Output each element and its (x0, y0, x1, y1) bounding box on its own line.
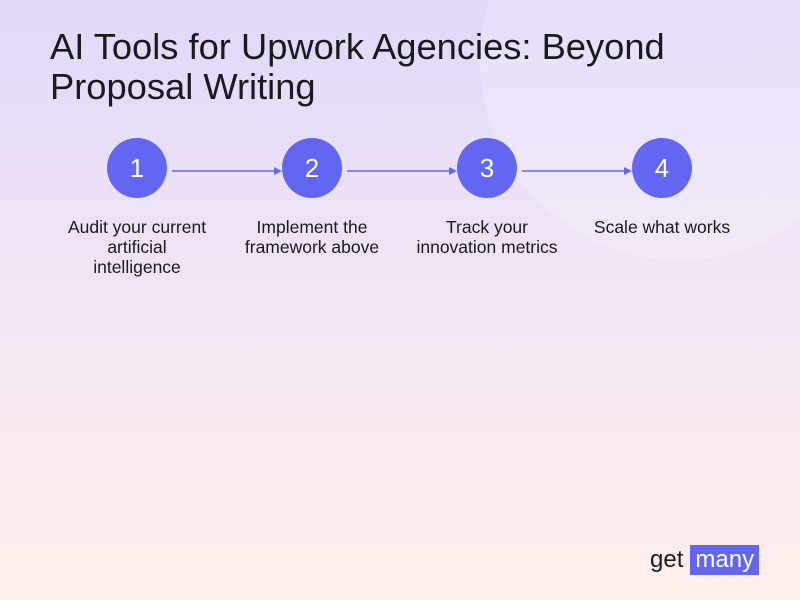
step 3 (457, 138, 517, 198)
label 3: Track your innovation metrics (416, 217, 558, 257)
step 4 (632, 138, 692, 198)
step 2: 2 (305, 153, 319, 183)
label 2: Implement the framework above (245, 217, 379, 257)
step 1 (107, 138, 167, 198)
title (50, 26, 665, 107)
title: Proposal Writing (50, 66, 316, 107)
logo: many (695, 546, 754, 573)
step 3: 3 (480, 153, 494, 183)
step 2 (282, 138, 342, 198)
title: AI Tools for Upwork Agencies: Beyond (50, 26, 665, 67)
label 4: Scale what works (594, 217, 730, 237)
label 1: Audit your current artificial intelligence (68, 217, 206, 277)
step 1: 1 (130, 153, 144, 183)
logo (650, 545, 759, 575)
logo: get (650, 546, 683, 573)
step 4: 4 (655, 153, 669, 183)
